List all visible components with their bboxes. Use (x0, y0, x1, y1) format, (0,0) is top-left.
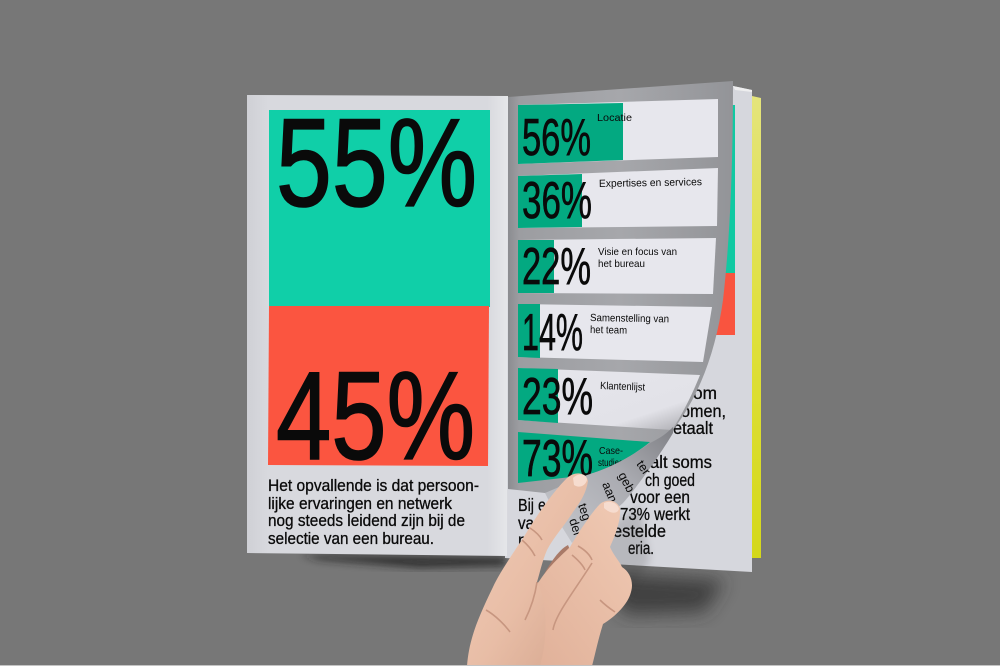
right page paragraph: Bij een (518, 495, 562, 515)
row: 56% Locatie (518, 99, 718, 167)
row: 22% Visie en focus (518, 238, 716, 296)
underside mirrored text (566, 458, 653, 538)
row: 56% Locatie: Locatie (597, 112, 632, 124)
row: 22% Visie en focus: Visie en focus van (598, 246, 677, 258)
right page paragraph: omen, (681, 401, 726, 421)
right page paragraph: ch goed (645, 470, 695, 490)
row: 23% Klantenlijst: 23% (522, 368, 593, 426)
green block 55%: 55% (276, 94, 477, 233)
underside mirrored text: geb (615, 470, 638, 495)
row: 14% Samenstelling (518, 304, 712, 362)
right page paragraph: estelde (613, 521, 666, 541)
red block 45% (268, 306, 489, 486)
next page colour edge (715, 105, 735, 335)
knuckle creases and finger gaps (486, 528, 615, 632)
red block 45%: 45% (276, 347, 475, 486)
curled ring finger behind (540, 545, 574, 586)
row: 73% Case-studies: studies (598, 457, 623, 469)
row: 36% Expertises en services: Expertises en services (599, 176, 702, 190)
right page paragraph (518, 383, 726, 558)
row: 22% Visie en focus: 22% (522, 238, 591, 296)
green block 55% (269, 94, 490, 307)
right page paragraph: voor een (630, 487, 690, 507)
panel: left page (247, 94, 508, 556)
yellow page edge (752, 96, 761, 558)
row: 14% Samenstelling: 14% (522, 304, 583, 362)
hand shadow on page (590, 505, 650, 600)
row: 56% Locatie: 56% (522, 109, 591, 167)
bottom edge line (0, 665, 1000, 666)
book shadow (300, 555, 725, 615)
curled page underside (545, 427, 673, 543)
underside mirrored text: teg (575, 502, 594, 522)
underside mirrored text: aan (599, 480, 620, 505)
panel: right page (505, 86, 752, 572)
right page paragraph: etaalt (673, 418, 713, 438)
row: 73% Case-studies: 73% (522, 430, 593, 488)
left page paragraph: Het opvallende is dat persoon- (268, 477, 479, 495)
row: 36% Expertises en services (518, 168, 718, 230)
middle finger and back of hand (510, 501, 632, 666)
left page paragraph: nog steeds leidend zijn bij de (268, 512, 465, 530)
left page paragraph: selectie van een bureau. (268, 530, 434, 548)
fingernails (573, 474, 619, 513)
row: 14% Samenstelling: Samenstelling van (590, 312, 669, 325)
row: 14% Samenstelling: het team (590, 324, 627, 337)
right page paragraph: va (518, 513, 534, 533)
panel: curled page (508, 81, 733, 493)
right page paragraph: om (693, 383, 717, 403)
row: 23% Klantenlijst (518, 368, 700, 430)
index finger and palm (467, 473, 588, 666)
left page paragraph: lijke ervaringen en netwerk (268, 495, 453, 513)
right page paragraph: n (518, 530, 527, 550)
left page paragraph (268, 477, 479, 548)
right page paragraph: eria. (628, 538, 654, 558)
right page paragraph: alt soms (650, 452, 712, 472)
icon: hand holding page (467, 473, 632, 666)
underside mirrored text: der (566, 517, 585, 538)
underside mirrored text: ter (634, 458, 653, 478)
row: 23% Klantenlijst: Klantenlijst (600, 380, 645, 394)
right page paragraph: 73% werkt (620, 504, 690, 524)
row: 22% Visie en focus: het bureau (598, 258, 645, 270)
row: 73% Case-studies: Case- (599, 445, 623, 457)
row: 36% Expertises en services: 36% (522, 172, 592, 230)
